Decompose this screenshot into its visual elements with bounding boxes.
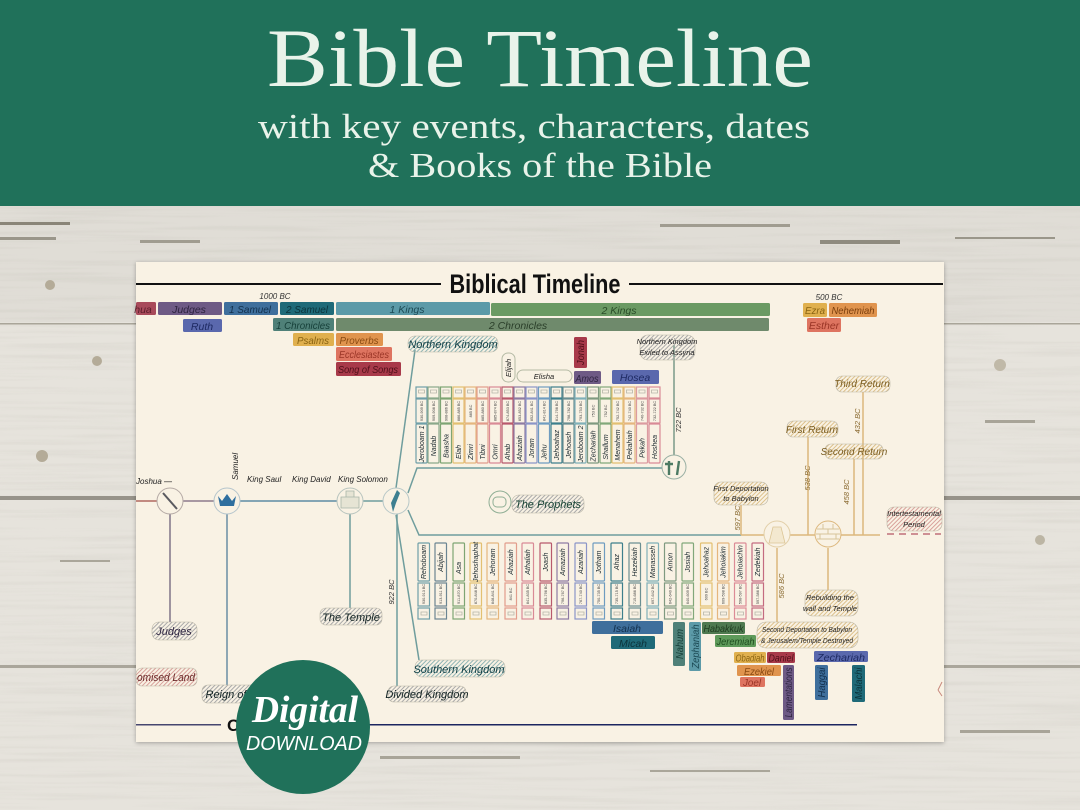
northern prophets: Hosea xyxy=(620,372,650,384)
timeline vertical date labels: 922 BC xyxy=(387,579,396,605)
label: The Prophets: The Prophets xyxy=(515,499,582,511)
southern kings table: 841 BC xyxy=(509,587,513,600)
mark at right edge xyxy=(938,682,942,696)
southern kings table: 870-848 BC xyxy=(474,584,478,604)
label: Reign of Kings xyxy=(202,685,262,703)
northern kings table: 908-886 BC xyxy=(444,401,448,421)
poster panel xyxy=(136,262,944,742)
northern kings table: Shallum xyxy=(603,434,610,460)
southern kings table: 597-586 BC xyxy=(756,584,760,604)
northern kings table: Elah xyxy=(456,445,463,459)
books of the Bible: upper bars: 2 Samuel xyxy=(285,304,329,316)
icon: Babylon xyxy=(764,521,790,547)
label: First Return xyxy=(786,421,839,437)
timeline vertical date labels: 597 BC xyxy=(733,505,742,531)
southern kings table: 835-796 BC xyxy=(544,584,548,604)
icon: temple xyxy=(337,488,363,514)
southern kings table: Jehoram xyxy=(490,548,497,577)
northern kings table: 740-732 BC xyxy=(640,401,644,421)
label: Promised Land xyxy=(136,668,197,686)
label: The Prophets xyxy=(512,495,584,513)
southern kings table xyxy=(418,541,764,619)
northern kings table: 930-909 BC xyxy=(420,401,424,421)
timeline connector lines xyxy=(136,345,941,686)
northern kings table: Tibni xyxy=(480,444,487,460)
northern kings table: 752 BC xyxy=(604,404,608,417)
timeline person names: King Solomon xyxy=(338,475,388,484)
southern kings table: Ahaziah xyxy=(508,549,515,576)
label: Rebuilding the wall and Temple xyxy=(803,590,858,616)
northern kings table: 814-798 BC xyxy=(555,401,559,421)
southern kings table: 642-640 BC xyxy=(668,584,672,604)
northern kings table: Jeroboam 1 xyxy=(419,425,426,463)
label: Second Deportation: & Jerusalem/Temple Destroyed xyxy=(761,636,854,645)
icon: crown xyxy=(214,488,240,514)
subtitle: with key events, characters, dates xyxy=(258,107,810,146)
southern kings table: Jehoahaz xyxy=(704,546,710,578)
books of the Bible: upper bars: Psalms xyxy=(297,335,330,347)
books of the Bible: upper bars: 2 Chronicles xyxy=(488,320,548,332)
badge: digital download xyxy=(236,660,370,794)
label: Judges xyxy=(152,622,197,640)
label: The Temple: The Temple xyxy=(322,612,380,624)
label: Divided Kingdom: Divided Kingdom xyxy=(385,689,469,701)
southern prophets: Malachi xyxy=(853,667,865,700)
label: Rebuilding the wall and Temple: wall and Temple xyxy=(803,604,857,613)
label: Reign of Kings: Reign of xyxy=(206,689,247,701)
label: The Temple xyxy=(320,608,382,625)
southern kings table: Manasseh xyxy=(650,546,657,578)
southern kings table: Jotham xyxy=(596,550,603,574)
subtitle xyxy=(258,107,810,185)
southern kings table: 796-767 BC xyxy=(561,584,565,604)
label: Intertestamental Period: Intertestamental xyxy=(887,509,941,518)
southern kings table: 697-642 BC xyxy=(651,584,655,604)
timeline vertical date labels: 722 BC xyxy=(674,407,683,433)
date labels: 500 BC xyxy=(816,293,843,302)
southern kings table: Hezekiah xyxy=(632,547,639,577)
timeline person names: King David xyxy=(292,475,331,484)
timeline vertical date labels: 538 BC xyxy=(803,465,812,491)
southern kings table: 609 BC xyxy=(704,587,708,600)
icons: southern kings verdicts xyxy=(421,612,761,615)
header band xyxy=(0,0,1080,206)
southern kings table: Jehoshaphat xyxy=(473,541,480,583)
label: Southern Kingdom: Southern Kingdom xyxy=(413,664,505,676)
southern kings table: 609-598 BC xyxy=(722,584,726,604)
books of the Bible: upper bars: 1 Chronicles xyxy=(276,320,331,332)
label: Third Return xyxy=(834,376,890,392)
southern kings table: Athaliah xyxy=(525,549,532,576)
northern prophets: Elisha xyxy=(534,372,554,381)
southern prophets: Ezekiel xyxy=(744,666,775,678)
label: Second Return: Second Return xyxy=(821,447,888,458)
icon: sword xyxy=(157,488,183,514)
label: Second Deportation xyxy=(757,622,858,648)
southern prophets: Isaiah xyxy=(613,623,641,635)
label: Exiled to Assyria: Northern Kingdom xyxy=(637,337,697,346)
southern kings table: Zedekiah xyxy=(755,547,762,577)
northern kings table: Jeroboam 2 xyxy=(578,425,585,463)
label: Rebuilding the wall and Temple: Rebuilding the xyxy=(806,593,854,602)
southern kings table: 640-609 BC xyxy=(686,584,690,604)
northern kings table: Hoshea xyxy=(652,435,659,459)
northern kings table: 753 BC xyxy=(592,404,596,417)
northern kings table: 885 BC xyxy=(469,404,473,417)
northern kings table: Jehoash xyxy=(566,432,573,459)
label: Second Deportation: Second Deportation to Babylon xyxy=(762,625,852,634)
timeline person names: Samuel xyxy=(231,453,240,480)
label: Exiled to Assyria: Exiled to Assyria xyxy=(639,348,695,357)
southern prophets: Nahum xyxy=(674,629,686,659)
northern kings table: 853-852 BC xyxy=(518,401,522,421)
northern kings table: Omri xyxy=(492,444,500,460)
label: Intertestamental Period: Period xyxy=(903,520,926,529)
timeline vertical date labels xyxy=(387,407,862,605)
timeline vertical date labels: 586 BC xyxy=(777,573,786,599)
timeline vertical date labels: 458 BC xyxy=(842,479,851,505)
icons: northern kings verdicts xyxy=(418,390,658,393)
northern kings table: Zechariah xyxy=(590,430,598,463)
icon: speech bubbles xyxy=(489,491,511,513)
northern kings table: Joram xyxy=(529,438,536,459)
northern kings table: Jehoahaz xyxy=(554,429,561,461)
northern kings table: 885-880 BC xyxy=(481,401,485,421)
northern kings table: Baasha xyxy=(444,434,450,458)
northern kings table: 852-841 BC xyxy=(530,401,534,421)
northern kings table: 909-908 BC xyxy=(432,401,436,421)
icon: land of Israel xyxy=(383,488,409,514)
books of the Bible: upper bars: 2 Kings xyxy=(600,305,637,317)
northern kings table: 885-874 BC xyxy=(494,401,498,421)
label: First Deportation: First Deportation xyxy=(713,484,769,493)
southern kings table: Azariah xyxy=(578,550,585,575)
southern kings table: Jehoiakim xyxy=(720,546,728,579)
label: Third Return: Third Return xyxy=(834,379,890,390)
northern kings table: Ahaziah xyxy=(517,435,524,462)
southern kings table: 735-715 BC xyxy=(615,584,619,604)
label: First Deportation xyxy=(713,482,769,505)
label: First Return: First Return xyxy=(786,425,839,436)
southern prophets: Micah xyxy=(619,638,647,650)
books of the Bible: upper bars: Ruth xyxy=(191,321,213,333)
timeline person names xyxy=(135,453,388,486)
southern prophets: Lamentations xyxy=(784,668,795,718)
southern prophets: Zephaniah xyxy=(690,624,702,669)
date labels xyxy=(259,292,843,302)
label: Exiled to Assyria xyxy=(637,335,697,360)
northern kings table: Zimri xyxy=(468,444,475,461)
southern kings table: 848-841 BC xyxy=(491,584,495,604)
books of the Bible: upper bars: hua xyxy=(134,304,152,316)
bottom testament line: Old Testament xyxy=(227,716,344,735)
southern prophets: Jeremiah xyxy=(716,636,755,648)
poster heading: Biblical Timeline xyxy=(450,269,620,299)
label: Judges: Judges xyxy=(155,626,192,638)
wood plank background xyxy=(0,206,1080,810)
timeline person names: Joshua — xyxy=(135,477,173,486)
southern kings table: 841-835 BC xyxy=(526,584,530,604)
northern kings table: 874-853 BC xyxy=(506,401,510,421)
northern kings table: 752-742 BC xyxy=(616,401,620,421)
northern kings table xyxy=(416,387,660,463)
icon: exile figures xyxy=(662,455,686,479)
books of the Bible: upper bars: Ecclesiastes xyxy=(339,349,390,361)
southern kings table: 911-870 BC xyxy=(457,584,461,604)
northern kings table: Pekah xyxy=(640,438,646,458)
badge: digital download: Digital xyxy=(251,689,358,731)
subtitle: & Books of the Bible xyxy=(368,146,712,185)
southern kings table: Amon xyxy=(668,553,674,572)
southern kings table: 913-911 BC xyxy=(439,584,443,604)
southern prophets: Zechariah xyxy=(816,652,865,664)
badge: digital download: DOWNLOAD xyxy=(246,733,362,755)
icon: wall xyxy=(815,521,841,547)
timeline vertical date labels: 432 BC xyxy=(853,408,862,434)
date labels: 1000 BC xyxy=(259,292,291,301)
southern kings table: 598-597 BC xyxy=(738,584,742,604)
books of the Bible: upper bars xyxy=(134,302,877,376)
southern prophets: Habakkuk xyxy=(704,623,744,635)
southern kings table: Abijah xyxy=(438,552,445,573)
books of the Bible: upper bars: Judges xyxy=(171,304,207,316)
southern kings table: Josiah xyxy=(685,552,692,573)
northern kings table: Jehu xyxy=(542,444,548,461)
books of the Bible: upper bars: Esther xyxy=(809,320,840,332)
northern kings table: 841-814 BC xyxy=(542,401,546,421)
books of the Bible: upper bars: Ezra xyxy=(805,305,825,317)
southern prophets: Joel xyxy=(742,677,762,689)
southern kings table: 930-913 BC xyxy=(422,584,426,604)
southern kings table: Ahaz xyxy=(614,554,621,571)
books of the Bible: upper bars: Nehemiah xyxy=(832,305,875,317)
books of the Bible: upper bars: Song of Songs xyxy=(338,364,399,376)
southern kings table: Rehoboam xyxy=(421,545,428,579)
books of the Bible: upper bars: 1 Samuel xyxy=(229,304,272,316)
label: Intertestamental Period xyxy=(887,507,942,531)
timeline person names: King Saul xyxy=(247,475,281,484)
southern prophets: Daniel xyxy=(768,652,794,664)
label: Promised Land: omised Land xyxy=(137,672,196,684)
southern kings table: 715-686 BC xyxy=(633,584,637,604)
northern kings table: Pekahiah xyxy=(627,430,634,460)
northern kings table: 798-782 BC xyxy=(567,401,571,421)
northern kings table: 793-753 BC xyxy=(579,401,583,421)
northern kings table: 886-885 BC xyxy=(457,401,461,421)
northern kings table: 742-740 BC xyxy=(628,401,632,421)
books of the Bible: upper bars: Proverbs xyxy=(340,335,379,347)
northern kings table: Ahab xyxy=(505,444,512,461)
northern kings table: Menahem xyxy=(615,429,622,461)
books of the Bible: upper bars: 1 Kings xyxy=(389,304,425,316)
northern prophets: Jonah xyxy=(575,340,587,366)
label: Northern Kingdom: Northern Kingdom xyxy=(408,339,498,351)
southern prophets xyxy=(592,621,868,720)
label: First Deportation: to Babylon xyxy=(723,494,759,503)
northern prophets: Elijah xyxy=(504,359,513,377)
southern kings table: Joash xyxy=(543,553,550,572)
southern prophets: Haggai xyxy=(816,667,828,698)
southern kings table: 767-740 BC xyxy=(579,584,583,604)
main title: Bible Timeline xyxy=(267,12,813,104)
northern kings table: Nadab xyxy=(431,436,438,456)
southern kings table: Amaziah xyxy=(560,548,567,577)
northern prophets: Amos xyxy=(575,373,599,385)
southern kings table: Jehoiachin xyxy=(738,545,744,580)
northern prophets xyxy=(502,337,659,385)
southern kings table: Asa xyxy=(456,562,463,575)
southern prophets: Obadiah xyxy=(736,652,765,664)
southern kings table: 750-735 BC xyxy=(597,584,601,604)
northern kings table: 732-722 BC xyxy=(653,401,657,421)
